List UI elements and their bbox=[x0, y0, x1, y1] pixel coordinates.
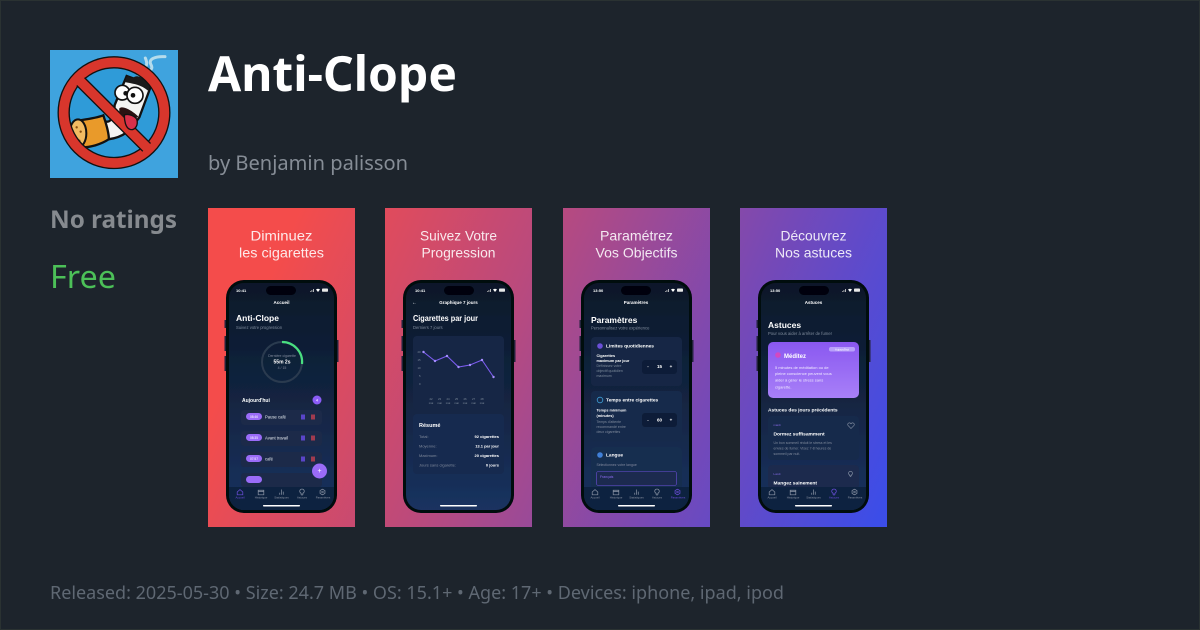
tip card: mangez: Lundi bbox=[774, 472, 781, 476]
tab bar: Astuces bbox=[829, 496, 840, 500]
phone: accueil: Anti-Clope bbox=[236, 313, 279, 323]
phone: paramètres: 13:50 bbox=[593, 288, 604, 293]
entries list: Pause café bbox=[265, 414, 287, 420]
tab bar: Historique bbox=[610, 496, 623, 500]
card: limites quotidiennes bbox=[591, 337, 682, 386]
phone: graphique: ← bbox=[412, 300, 417, 306]
entries list: 07:57 bbox=[250, 457, 258, 461]
card: limites quotidiennes: maximum bbox=[596, 374, 612, 378]
card: temps entre cigarettes: + bbox=[670, 418, 673, 422]
summary card: 13.1 par jour bbox=[475, 444, 499, 448]
footer metadata: Released: 2025-05-30 • Size: 24.7 MB • OS: 15.1+ • Age: 17+ • Devices: iphone, ipad, ipod bbox=[50, 581, 784, 605]
summary card: Total: bbox=[419, 434, 429, 439]
card: temps entre cigarettes: Temps d'attente bbox=[596, 420, 621, 424]
entries list: 08:46 bbox=[250, 415, 258, 419]
tab bar: Accueil bbox=[767, 496, 777, 500]
line chart: mai bbox=[429, 401, 434, 405]
card: limites quotidiennes: maximum par jour bbox=[596, 359, 630, 363]
summary card: Maximum: bbox=[419, 453, 437, 458]
screenshot 1 panel bbox=[208, 208, 355, 527]
tab bar: Statistiques bbox=[629, 496, 644, 500]
card: limites quotidiennes: objectif quotidien bbox=[596, 369, 623, 373]
card: temps entre cigarettes bbox=[591, 391, 682, 441]
entries list: café bbox=[265, 456, 274, 462]
screenshot 3 panel: Vos Objectifs bbox=[596, 244, 678, 260]
summary card: Moyenne: bbox=[419, 444, 437, 448]
title: Anti-Clope bbox=[208, 41, 457, 106]
summary card: 92 cigarettes bbox=[475, 434, 500, 439]
icon: smoke bbox=[139, 57, 165, 75]
phone: paramètres bbox=[580, 280, 694, 513]
add button: + bbox=[317, 468, 322, 475]
tip card: dormez bbox=[768, 416, 859, 460]
progress ring bbox=[262, 342, 302, 382]
card: langue: Sélectionnez votre langue bbox=[596, 463, 637, 467]
phone: graphique: 10:41 bbox=[415, 288, 426, 293]
tip card: méditez: pleine conscience peuvent vous bbox=[775, 371, 832, 376]
phone: astuces bbox=[756, 280, 870, 513]
line chart: mai bbox=[437, 401, 442, 405]
line chart: mai bbox=[446, 401, 451, 405]
tip card: méditez: Méditez bbox=[784, 354, 806, 360]
summary card: 20 cigarettes bbox=[475, 453, 500, 458]
phone: accueil: Accueil bbox=[273, 300, 290, 305]
screenshot 4 panel: Nos astuces bbox=[775, 244, 852, 260]
line chart: mai bbox=[463, 401, 468, 405]
card: temps entre cigarettes: recommandé entre bbox=[596, 425, 626, 429]
screenshot 2 panel: Progression bbox=[422, 244, 496, 260]
tab bar bbox=[584, 487, 689, 510]
card: limites quotidiennes: Cigarettes bbox=[596, 354, 615, 358]
phone: accueil: 4 bbox=[316, 398, 319, 402]
phone: astuces: 13:50 bbox=[770, 288, 781, 293]
phone: paramètres: Paramètres bbox=[624, 300, 649, 305]
card: limites quotidiennes: 15 bbox=[657, 364, 662, 369]
heading: Suivez Votre bbox=[420, 228, 497, 244]
tab bar: Paramètres bbox=[316, 496, 331, 500]
tab bar: Historique bbox=[787, 496, 800, 500]
tip card: dormez: Un bon sommeil réduit le stress et les bbox=[774, 441, 832, 445]
tip card: dormez: Dormez suffisamment bbox=[774, 432, 825, 438]
card: langue: Français bbox=[600, 475, 614, 479]
entries list bbox=[241, 410, 322, 487]
entries list: Avant travail bbox=[265, 436, 288, 440]
tab bar: Astuces bbox=[297, 496, 308, 500]
phone: graphique bbox=[402, 280, 516, 513]
tip card: mangez bbox=[768, 465, 859, 489]
line chart: 24 bbox=[446, 397, 450, 401]
tip card: méditez: 5 minutes de méditation ou de bbox=[775, 365, 829, 370]
line chart: 28 bbox=[480, 397, 484, 401]
line chart bbox=[413, 336, 504, 410]
line chart: 26 bbox=[463, 397, 467, 401]
line chart: mai bbox=[454, 401, 459, 405]
tab bar: Paramètres bbox=[848, 496, 863, 500]
phone: astuces: Pour vous aider à arrêter de fumer bbox=[768, 331, 833, 336]
phone: paramètres: Personnalisez votre expérience bbox=[591, 326, 650, 330]
heading: Découvrez bbox=[780, 228, 846, 244]
summary card: Résumé bbox=[419, 423, 440, 429]
phone: accueil: Aujourd'hui bbox=[242, 398, 270, 404]
heading: Diminuez bbox=[250, 228, 312, 244]
line chart: 15 bbox=[418, 358, 421, 362]
progress ring: 55m 2s bbox=[274, 360, 291, 366]
progress ring: Dernière cigarette bbox=[268, 354, 296, 358]
line chart: mai bbox=[471, 401, 476, 405]
phone: paramètres: Paramètres bbox=[591, 315, 638, 325]
screenshot 1 panel: les cigarettes bbox=[239, 244, 324, 260]
phone: astuces: Astuces bbox=[768, 320, 801, 330]
tab bar: Statistiques bbox=[274, 496, 289, 500]
card: langue: Langue bbox=[606, 452, 623, 458]
tip card: dormez: envies de fumer. Visez 7-8 heures de bbox=[774, 446, 831, 450]
developer name: by Benjamin palisson bbox=[208, 149, 408, 176]
icon: cigarette bbox=[70, 76, 151, 147]
tip card: mangez: Mangez sainement bbox=[774, 480, 817, 486]
phone: astuces: Astuces bbox=[805, 300, 823, 305]
tab bar: Accueil bbox=[590, 496, 600, 500]
entries list: 08:35 bbox=[250, 436, 258, 440]
ratings label: No ratings bbox=[50, 203, 177, 236]
tip card: dormez: sommeil par nuit. bbox=[774, 452, 800, 456]
tab bar: Accueil bbox=[235, 496, 245, 500]
price: Free bbox=[50, 255, 116, 298]
add button bbox=[312, 464, 327, 478]
tip card: dormez: mardi bbox=[774, 423, 781, 427]
line chart: 27 bbox=[472, 397, 475, 401]
tab bar: Historique bbox=[255, 496, 268, 500]
line chart: 25 bbox=[455, 397, 458, 401]
line chart: 23 bbox=[438, 397, 441, 401]
phone: graphique: Cigarettes par jour bbox=[413, 314, 478, 323]
card: temps entre cigarettes: Temps minimum bbox=[596, 408, 627, 412]
tab bar: Astuces bbox=[652, 496, 663, 500]
phone: graphique: Graphique 7 jours bbox=[439, 300, 478, 305]
card: limites quotidiennes: Limites quotidiennes bbox=[606, 344, 654, 350]
line chart: mai bbox=[480, 401, 485, 405]
screenshot 2 panel bbox=[385, 208, 532, 527]
card: temps entre cigarettes: - bbox=[647, 418, 649, 422]
screenshot 3 panel bbox=[563, 208, 710, 527]
progress ring: 4 / 15 bbox=[278, 366, 286, 370]
tip card: méditez: Aujourd'hui bbox=[835, 348, 849, 352]
tab bar bbox=[761, 487, 866, 510]
screenshot 4 panel bbox=[740, 208, 887, 527]
tip card: méditez: aider à gérer le stress sans bbox=[775, 378, 823, 382]
icon: cigarette face bbox=[115, 85, 143, 130]
card: limites quotidiennes: Définissez votre bbox=[596, 364, 621, 368]
card: langue bbox=[591, 447, 682, 489]
summary card: Jours sans cigarette: bbox=[419, 462, 456, 468]
summary card bbox=[413, 414, 504, 474]
phone: accueil: Suivez votre progression bbox=[236, 325, 283, 330]
tip card: méditez bbox=[768, 342, 859, 398]
card: temps entre cigarettes: Temps entre cigarettes bbox=[606, 398, 658, 404]
icon: prohibition ring bbox=[64, 62, 164, 163]
card: limites quotidiennes: + bbox=[670, 364, 673, 369]
heading: Paramétrez bbox=[600, 228, 673, 244]
card: temps entre cigarettes: (minutes) bbox=[596, 414, 614, 418]
line chart: 5 bbox=[419, 374, 421, 378]
card: temps entre cigarettes: deux cigarettes bbox=[596, 430, 620, 434]
line chart: 20 bbox=[418, 350, 421, 354]
summary card: 0 jours bbox=[486, 462, 500, 468]
line chart: 22 bbox=[429, 397, 433, 401]
card: limites quotidiennes: - bbox=[647, 364, 649, 369]
phone: graphique: Derniers 7 jours bbox=[413, 325, 443, 330]
line chart: 0 bbox=[419, 382, 421, 386]
tip card: méditez: cigarette. bbox=[775, 384, 791, 390]
tab bar: Statistiques bbox=[806, 496, 821, 500]
app icon: no smoking cigarette bbox=[50, 50, 178, 178]
phone: astuces: Astuces des jours précédents bbox=[768, 408, 838, 414]
phone: accueil: 10:41 bbox=[236, 288, 247, 293]
tab bar bbox=[229, 487, 334, 510]
line chart: 10 bbox=[418, 366, 421, 370]
tab bar: Paramètres bbox=[671, 496, 686, 500]
card: temps entre cigarettes: 60 bbox=[657, 418, 662, 422]
phone: accueil bbox=[224, 280, 338, 513]
